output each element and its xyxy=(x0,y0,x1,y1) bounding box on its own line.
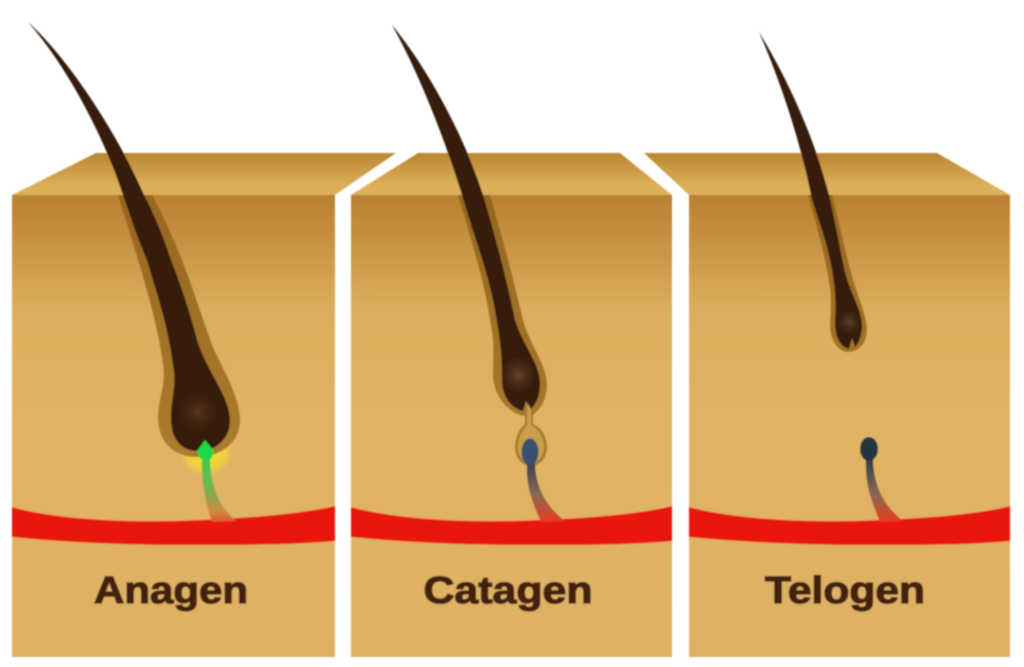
hair bulb highlight xyxy=(171,382,225,442)
skin block front face xyxy=(689,195,1010,657)
panel: telogen xyxy=(644,32,1010,657)
blood vessel xyxy=(12,506,335,545)
pale inner sheath xyxy=(518,405,544,463)
papilla xyxy=(860,437,878,461)
panel: catagen xyxy=(351,25,672,657)
label: Anagen xyxy=(94,570,248,612)
hair shaft and bulb xyxy=(28,22,230,451)
growth glow xyxy=(177,419,235,481)
follicle sheath xyxy=(808,195,867,352)
hair bulb highlight xyxy=(502,349,534,401)
papilla stem xyxy=(866,458,903,522)
papilla stem xyxy=(202,456,236,522)
hair shaft and bulb xyxy=(759,32,862,349)
label: Telogen xyxy=(765,570,925,612)
skin block front face xyxy=(351,195,672,657)
blood vessel xyxy=(351,506,672,545)
green arrow tip xyxy=(197,440,214,459)
papilla xyxy=(522,438,538,466)
follicle sheath xyxy=(118,195,240,457)
hair shaft and bulb xyxy=(392,25,540,411)
hair bulb highlight xyxy=(838,304,860,340)
label: Catagen xyxy=(424,570,592,612)
blood vessel xyxy=(689,506,1010,545)
skin block top face xyxy=(644,153,1010,195)
panel: anagen xyxy=(12,22,396,657)
skin block top face xyxy=(351,153,672,195)
follicle sheath xyxy=(458,195,547,466)
papilla stem xyxy=(527,462,565,522)
skin block front face xyxy=(12,195,335,657)
skin block top face xyxy=(12,153,396,195)
